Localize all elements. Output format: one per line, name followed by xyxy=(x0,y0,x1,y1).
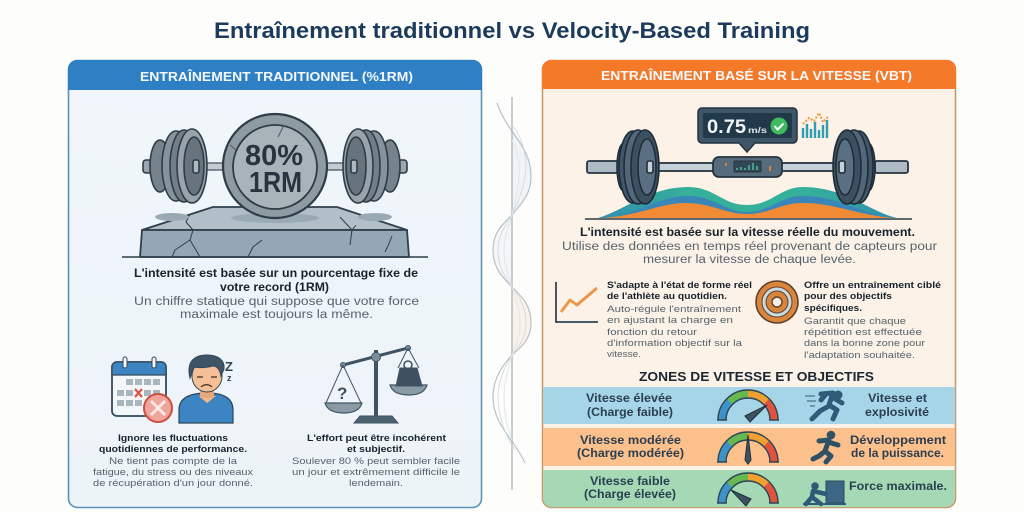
panel: traditional training xyxy=(68,60,482,508)
zones heading: ZONES DE VITESSE ET OBJECTIFS xyxy=(639,369,874,384)
icon: pushing heavy load xyxy=(803,481,846,505)
left plates xyxy=(143,129,207,203)
right plates xyxy=(343,129,407,203)
icon: tired athlete: Z xyxy=(225,359,233,374)
velocity wave xyxy=(585,187,912,219)
speed display: 0.75 xyxy=(707,117,746,138)
left plates xyxy=(617,130,659,204)
panel header: ENTRAÎNEMENT BASÉ SUR LA VITESSE (VBT) xyxy=(601,68,912,83)
central wave divider xyxy=(493,97,531,490)
text: ignores fluctuations: de récupération d'un jour donné. xyxy=(93,478,253,489)
icon: sprinter xyxy=(805,391,842,419)
text: adapts to daily form: de l'athlète au quotidien. xyxy=(607,291,727,302)
text: targeted training: répétition est effectuée xyxy=(804,327,922,338)
zone: moderate velocity xyxy=(543,428,955,466)
panel header xyxy=(68,60,482,90)
illustration: barbell on cracked stone xyxy=(122,114,428,257)
icon: rising line chart xyxy=(556,282,598,322)
main statement xyxy=(562,227,937,266)
mini bar chart xyxy=(803,113,829,138)
text: targeted training xyxy=(804,280,941,361)
text: ignores fluctuations: quotidiennes de performance. xyxy=(99,444,247,455)
icon: tired athlete xyxy=(179,355,233,423)
illustration: instrumented barbell xyxy=(585,108,912,219)
icon: target xyxy=(756,281,798,323)
panel background xyxy=(542,60,956,508)
panel: velocity-based training xyxy=(542,60,956,508)
title: Entraînement traditionnel vs Velocity-Based Training xyxy=(214,18,810,43)
text: targeted training: Garantit que chaque xyxy=(804,316,906,327)
central 80% 1RM plate: 80% xyxy=(245,140,303,172)
text: adapts to daily form: Auto-régule l'entraînement xyxy=(607,304,741,315)
main statement: votre record (1RM) xyxy=(220,282,329,294)
zone: low velocity: (Charge élevée) xyxy=(584,489,676,501)
stone slab xyxy=(140,207,409,257)
zone: low velocity: Vitesse faible xyxy=(590,476,670,488)
text: inconsistent effort: un jour et extrêmement difficile le xyxy=(292,467,460,478)
central 80% 1RM plate: 1RM xyxy=(249,167,302,199)
gauge: needle left xyxy=(717,473,779,506)
main statement: mesurer la vitesse de chaque levée. xyxy=(643,254,856,266)
zone: low velocity: Force maximale. xyxy=(849,481,947,493)
text: adapts to daily form: d'information objectif sur la xyxy=(607,338,743,349)
icon: tired athlete: z xyxy=(227,373,232,383)
text: ignores fluctuations: Ignore les fluctuations xyxy=(118,433,228,444)
main statement: Utilise des données en temps réel provenant de capteurs pour xyxy=(562,241,937,253)
bar xyxy=(195,163,355,170)
main statement: Un chiffre statique qui suppose que votre force xyxy=(134,296,419,308)
text: targeted training: pour des objectifs xyxy=(804,291,892,302)
text: inconsistent effort: L'effort peut être incohérent xyxy=(307,433,447,444)
zone: moderate velocity: (Charge modérée) xyxy=(577,448,684,460)
icon: balance scale: ? xyxy=(337,384,347,403)
text: targeted training: l'adaptation souhaitée. xyxy=(804,350,915,361)
central 80% 1RM plate xyxy=(223,114,327,218)
gauge: needle right xyxy=(717,390,779,422)
zone: moderate velocity: Développement xyxy=(850,435,946,447)
zone: high velocity: Vitesse élevée xyxy=(586,393,672,405)
icon: calendar with cancel mark xyxy=(112,357,172,422)
icon: runner xyxy=(813,431,838,462)
main statement xyxy=(134,268,419,321)
text: inconsistent effort xyxy=(292,433,460,489)
text: adapts to daily form: vitesse. xyxy=(607,349,641,360)
bar and sensor xyxy=(587,157,908,177)
main statement: L'intensité est basée sur la vitesse réelle du mouvement. xyxy=(580,227,915,239)
text: adapts to daily form xyxy=(607,280,752,360)
text: ignores fluctuations: Ne tient pas compte de la xyxy=(109,456,238,467)
text: inconsistent effort: lendemain. xyxy=(349,478,403,489)
text: inconsistent effort: et subjectif. xyxy=(347,444,405,455)
zone: moderate velocity: Vitesse modérée xyxy=(580,435,681,447)
text: targeted training: Offre un entraînement ciblé xyxy=(804,280,941,291)
speed display xyxy=(698,108,797,152)
text: targeted training: dans la bonne zone pour xyxy=(804,338,925,349)
zone: high velocity: explosivité xyxy=(865,407,929,419)
text: ignores fluctuations: fatigue, du stress ou des niveaux xyxy=(93,467,253,478)
zone: moderate velocity: de la puissance. xyxy=(851,448,944,460)
text: ignores fluctuations xyxy=(93,433,253,489)
text: adapts to daily form: en ajustant la charge en xyxy=(607,315,733,326)
gauge: needle centre xyxy=(717,432,779,464)
zone: high velocity: (Charge faible) xyxy=(587,407,673,419)
panel background xyxy=(68,60,482,508)
panel header: ENTRAÎNEMENT TRADITIONNEL (%1RM) xyxy=(140,69,413,84)
zone: low velocity xyxy=(543,470,955,507)
panel header xyxy=(542,60,956,89)
main statement: L'intensité est basée sur un pourcentage fixe de xyxy=(134,268,418,280)
right plates xyxy=(833,130,875,204)
main statement: maximale est toujours la même. xyxy=(180,309,373,321)
icon: balance scale xyxy=(325,346,427,423)
text: adapts to daily form: S'adapte à l'état de forme réel xyxy=(607,280,752,291)
ground line xyxy=(122,256,428,258)
text: targeted training: spécifiques. xyxy=(804,303,862,314)
zone: high velocity xyxy=(543,387,955,424)
zone: high velocity: Vitesse et xyxy=(868,393,927,405)
speed display: m/s xyxy=(748,125,767,135)
text: inconsistent effort: Soulever 80 % peut sembler facile xyxy=(292,456,460,467)
text: adapts to daily form: fonction du retour xyxy=(607,327,697,338)
